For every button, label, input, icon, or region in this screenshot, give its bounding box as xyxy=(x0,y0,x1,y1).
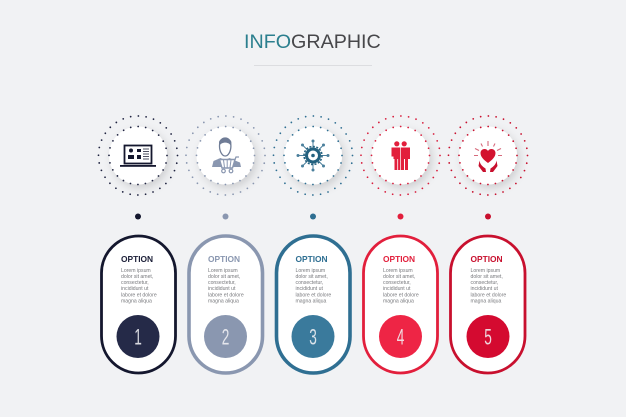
text block: Lorem ipsum xyxy=(383,268,413,274)
text block: consectetur, xyxy=(470,280,498,286)
panel: option 1 icon xyxy=(98,116,178,195)
panel: option 5 icon xyxy=(448,116,528,195)
text block: labore et dolore xyxy=(121,292,157,298)
number badge: 2 xyxy=(222,324,229,349)
icon: shopper with cart xyxy=(212,138,241,173)
text block: dolor sit amet, xyxy=(296,274,328,280)
text block: labore et dolore xyxy=(208,292,244,298)
text block: Lorem ipsum xyxy=(121,268,151,274)
icon: heart in hands xyxy=(474,141,502,172)
number badge: 4 xyxy=(397,324,404,349)
text block: labore et dolore xyxy=(470,292,506,298)
panel: option 5 xyxy=(450,236,525,373)
text block: Lorem ipsum xyxy=(296,268,325,274)
number badge: 3 xyxy=(309,324,317,349)
number badge: 1 xyxy=(134,324,142,349)
text block: incididunt ut xyxy=(121,286,149,292)
text block: dolor sit amet, xyxy=(121,274,153,280)
text block: labore et dolore xyxy=(383,292,419,298)
option 4 dot xyxy=(398,214,404,220)
number badge: 5 xyxy=(484,324,492,349)
text block: incididunt ut xyxy=(383,286,411,292)
heading: OPTION xyxy=(470,254,503,264)
icon: two people xyxy=(392,141,410,170)
text block: magna aliqua xyxy=(470,299,502,305)
text block: Lorem ipsum xyxy=(470,268,500,274)
text block: magna aliqua xyxy=(383,299,414,305)
panel: option 4 icon xyxy=(361,116,440,195)
option 1 dot xyxy=(135,214,141,220)
heading: OPTION xyxy=(296,254,328,264)
text block: magna aliqua xyxy=(121,299,152,305)
text block: Lorem ipsum xyxy=(208,268,238,274)
panel: option 2 xyxy=(189,236,262,373)
option 5 dot xyxy=(485,214,491,220)
text block: incididunt ut xyxy=(470,286,499,292)
text block: magna aliqua xyxy=(208,299,239,305)
text block: consectetur, xyxy=(383,280,411,286)
title: INFOGRAPHIC xyxy=(244,31,381,53)
panel: option 1 xyxy=(102,236,176,373)
panel: option 2 icon xyxy=(186,116,265,195)
text block: consectetur, xyxy=(208,280,236,286)
text block: incididunt ut xyxy=(296,286,324,292)
text block: consectetur, xyxy=(121,280,149,286)
panel: option 4 xyxy=(364,236,438,373)
icon: laptop xyxy=(120,146,156,167)
option 2 dot xyxy=(222,214,228,220)
text block: incididunt ut xyxy=(208,286,236,292)
text block: dolor sit amet, xyxy=(208,274,240,280)
heading: OPTION xyxy=(121,254,153,264)
icon: ship wheel network xyxy=(296,140,330,172)
panel: option 3 xyxy=(276,236,350,373)
text block: magna aliqua xyxy=(296,299,327,305)
heading: OPTION xyxy=(208,254,240,264)
heading: OPTION xyxy=(383,254,415,264)
text block: consectetur, xyxy=(296,280,323,286)
option 3 dot xyxy=(310,214,316,220)
text block: dolor sit amet, xyxy=(383,274,415,280)
text block: labore et dolore xyxy=(296,292,331,298)
panel: option 3 icon xyxy=(274,116,352,195)
text block: dolor sit amet, xyxy=(470,274,503,280)
